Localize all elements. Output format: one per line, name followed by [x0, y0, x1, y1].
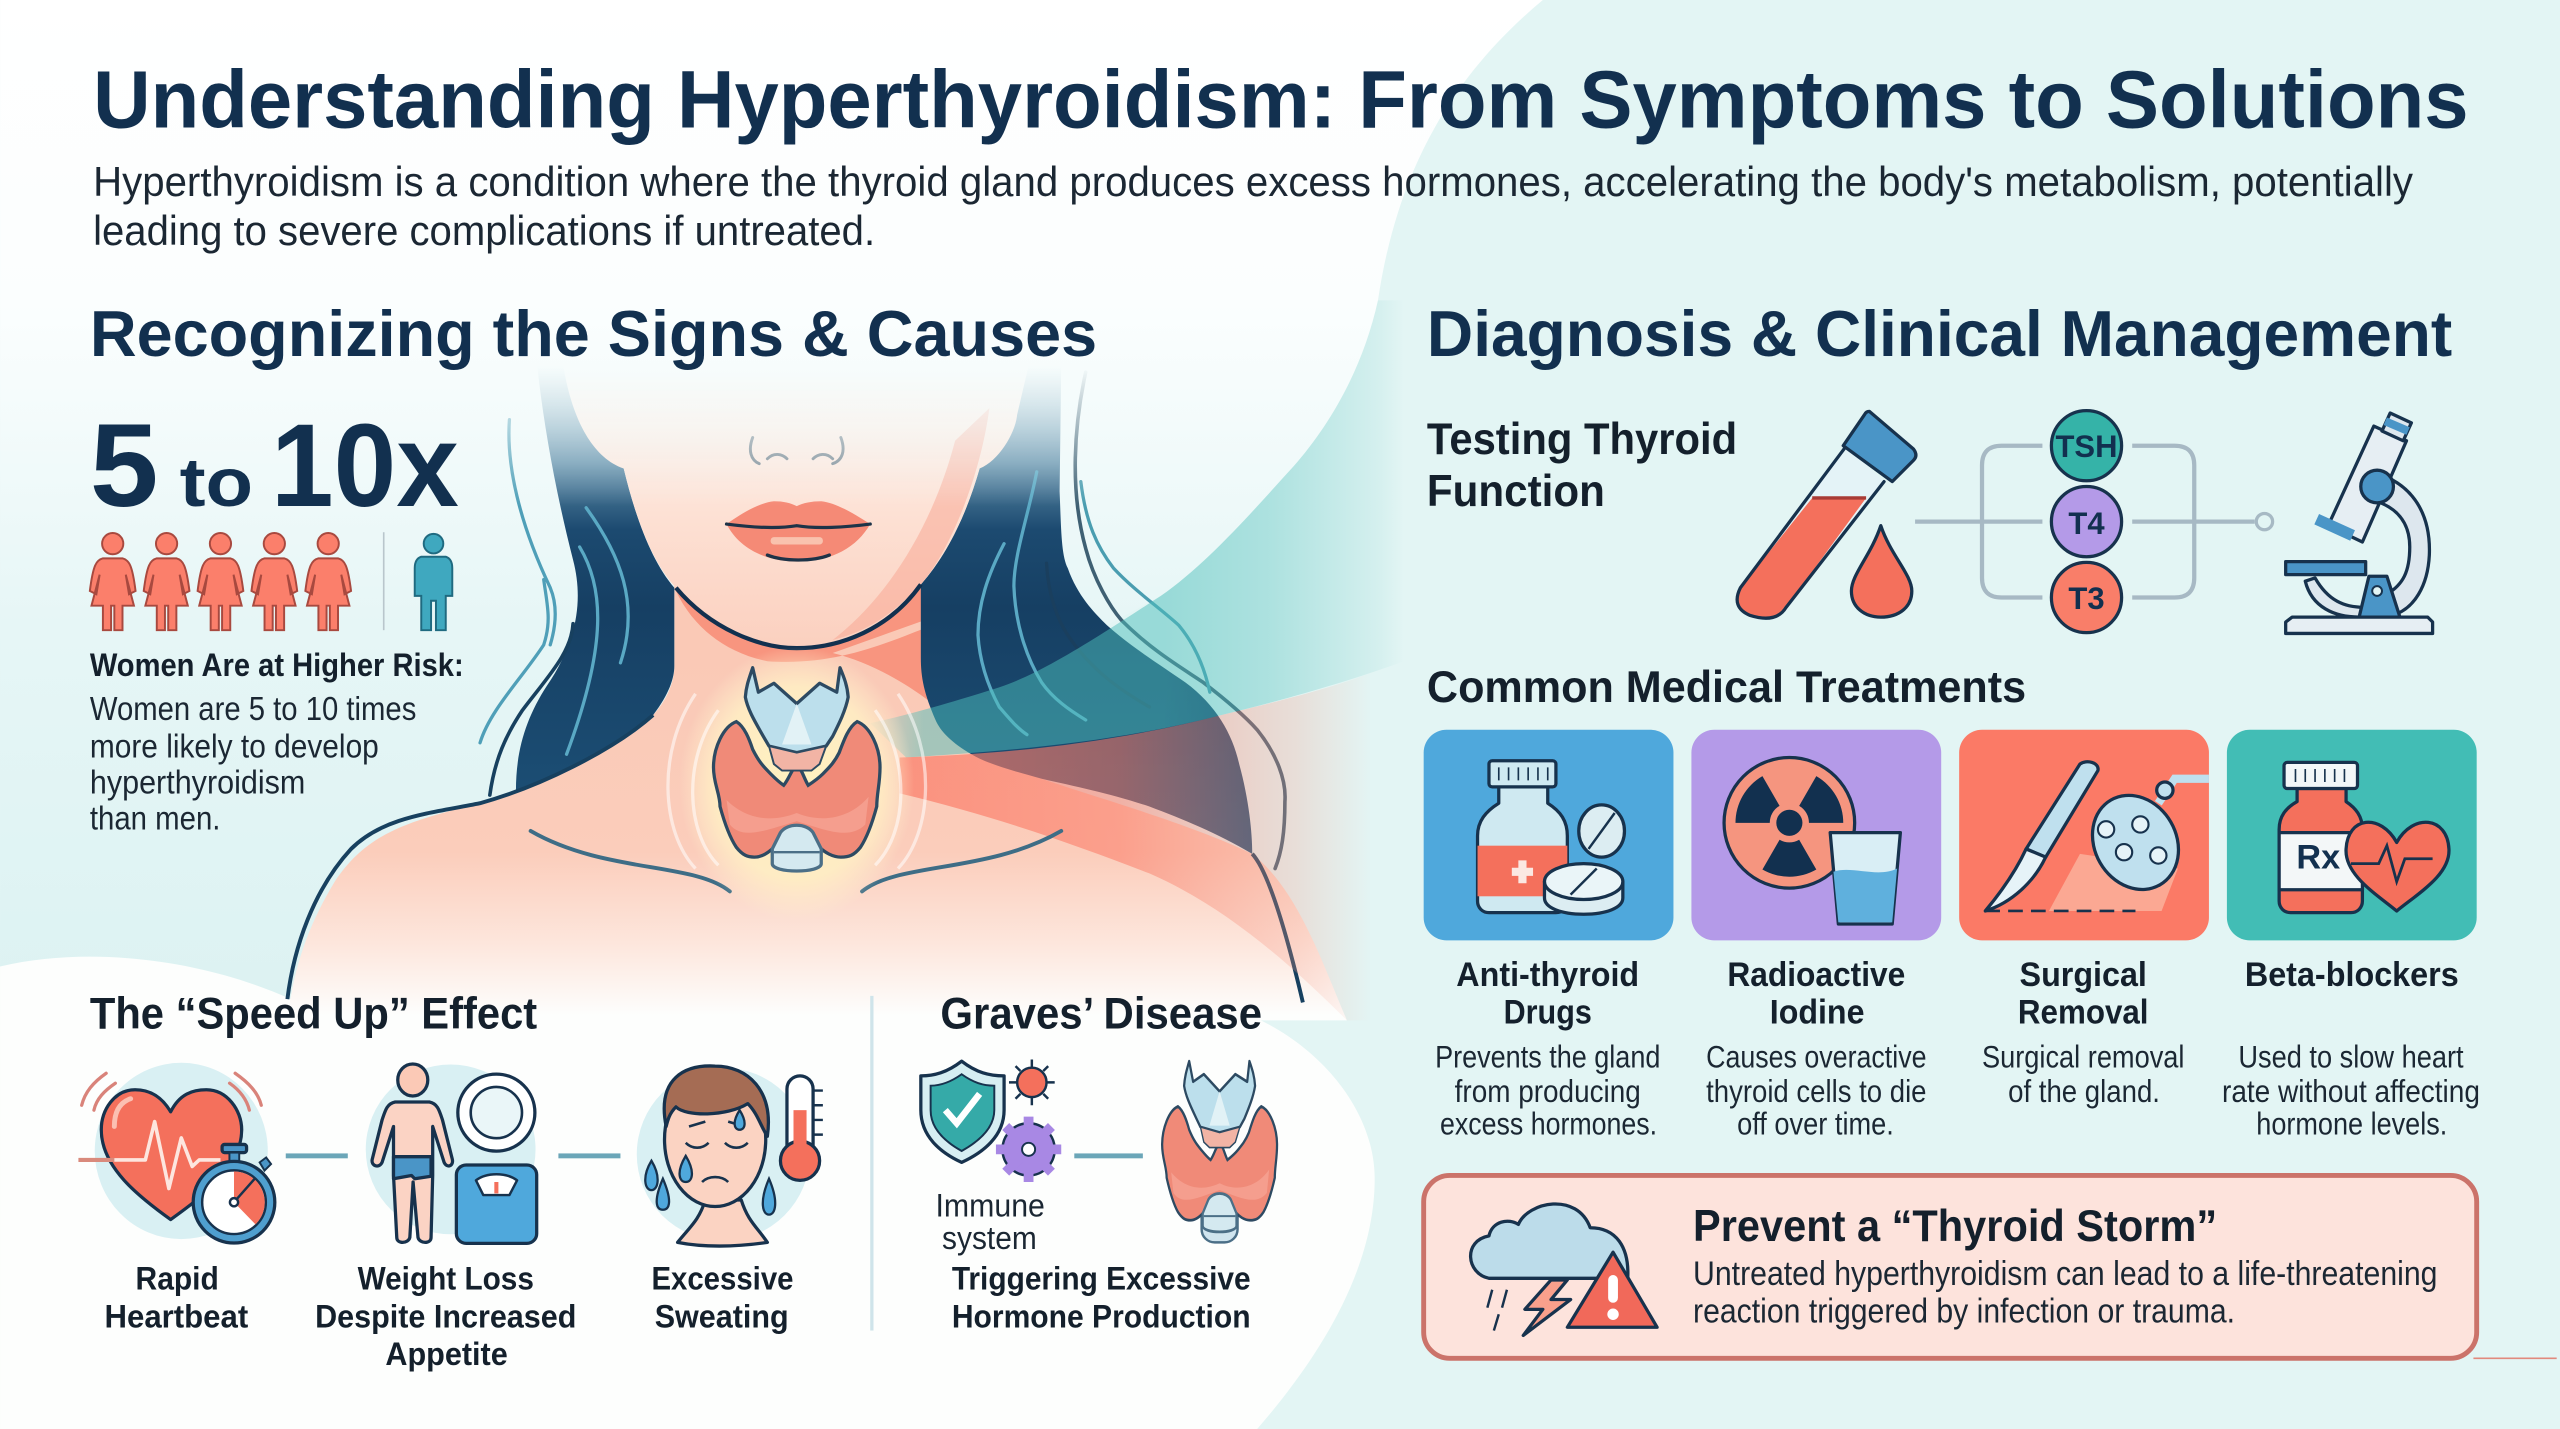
card: beta-blockers [2227, 730, 2477, 940]
labels: symptom captions: Heartbeat [105, 1297, 248, 1334]
captions: treatment descriptions: of the gland. [2008, 1074, 2160, 1109]
title: Understanding Hyperthyroidism: From Symptoms to Solutions [93, 54, 2469, 145]
TSH node [2051, 411, 2122, 481]
card: anti-thyroid drugs [1424, 730, 1673, 940]
lips [727, 501, 870, 562]
captions: treatment titles: Anti-thyroid [1456, 956, 1639, 994]
labels: symptom captions: Despite Increased [315, 1297, 576, 1334]
captions: treatment descriptions: from producing [1455, 1074, 1641, 1109]
text: women at higher risk: than men. [90, 800, 220, 837]
intro text: leading to severe complications if untreated. [93, 207, 875, 254]
icon: excessive sweating [637, 1066, 823, 1246]
heading: common medical treatments: Common Medical Treatments [1427, 663, 2026, 712]
captions: treatment descriptions [1435, 1040, 2480, 1142]
hair strands [480, 372, 1285, 869]
labels: symptom captions: Sweating [655, 1297, 789, 1334]
callout text: Untreated hyperthyroidism can lead to a life-threatening [1693, 1255, 2438, 1293]
statistic: 5 to 10x: to [180, 444, 253, 521]
labels: symptom captions: Hormone Production [952, 1297, 1251, 1334]
icon: bottle and pills [1478, 761, 1624, 914]
thyroid gland [713, 668, 880, 871]
right hair [921, 366, 1252, 854]
TSH node: TSH [2055, 429, 2117, 464]
icon: immune system [921, 1060, 1061, 1182]
captions: treatment titles: Beta-blockers [2245, 956, 2459, 994]
glow rings [668, 694, 926, 869]
text: women at higher risk [90, 646, 464, 837]
text: immune system label: system [942, 1219, 1037, 1256]
captions: treatment descriptions: Surgical removal [1982, 1040, 2184, 1075]
glow [679, 647, 914, 921]
captions: treatment titles: Radioactive [1727, 956, 1905, 994]
labels: symptom captions: Triggering Excessive [952, 1260, 1251, 1297]
icon: weight loss [366, 1064, 537, 1243]
callout text: Prevent a “Thyroid Storm” [1693, 1202, 2217, 1251]
captions: treatment titles: Iodine [1770, 994, 1864, 1032]
diagram: thyroid blood tests [1915, 411, 2273, 633]
left hair [516, 366, 674, 790]
T3 node: T3 [2068, 581, 2105, 616]
labels: symptom captions: Rapid [136, 1260, 219, 1297]
captions: treatment descriptions: thyroid cells to die [1706, 1074, 1927, 1109]
callout text [1693, 1202, 2438, 1330]
captions: treatment titles: Surgical [2020, 956, 2147, 994]
labels: symptom captions: Weight Loss [358, 1260, 534, 1297]
statistic: 5 to 10x [90, 400, 459, 531]
card: surgical removal [1959, 730, 2209, 940]
icon: radiation and glass [1724, 758, 1900, 924]
cheek shading [833, 408, 989, 640]
icon row: women versus men [90, 532, 452, 630]
collarbones [531, 831, 1061, 891]
icon: rapid heartbeat [78, 1063, 275, 1243]
labels: symptom captions: Appetite [385, 1335, 508, 1372]
text: women at higher risk: hyperthyroidism [90, 764, 305, 801]
heading: testing thyroid function [1427, 415, 1737, 516]
intro text [93, 158, 2413, 254]
icon: prescription bottle and heart: Rx [2296, 839, 2340, 877]
labels: symptom captions: Excessive [651, 1260, 793, 1297]
icon: test tube and drop [1737, 411, 1916, 618]
icon: storm cloud and warning [1471, 1204, 1657, 1335]
face [563, 366, 1029, 648]
jaw line [676, 584, 921, 648]
captions: treatment descriptions: rate without affecting [2222, 1074, 2480, 1109]
neck and shoulders [287, 571, 1347, 1020]
T4 node [2051, 487, 2122, 557]
captions: treatment descriptions: Prevents the gland [1435, 1040, 1660, 1075]
text: immune system label: Immune [936, 1186, 1045, 1223]
intro text: Hyperthyroidism is a condition where the thyroid gland produces excess hormones, accelerating the body's metabolism, potentially [93, 158, 2413, 205]
card: radioactive iodine [1691, 730, 1941, 940]
icon: microscope [2286, 413, 2433, 633]
captions: treatment descriptions: excess hormones. [1440, 1107, 1657, 1142]
chin shadow [676, 580, 931, 702]
teal beam [870, 300, 1404, 758]
heading: signs and causes: Recognizing the Signs & Causes [90, 297, 1097, 370]
nose [750, 438, 843, 464]
text: women at higher risk: more likely to develop [90, 729, 379, 766]
icon: scalpel and surgical lamp [1985, 762, 2209, 911]
figure fading into the page [287, 366, 1347, 1020]
captions: treatment descriptions: Used to slow heart [2238, 1040, 2464, 1075]
captions: treatment descriptions: hormone levels. [2256, 1107, 2447, 1142]
statistic: 5 to 10x: 5 [90, 400, 158, 531]
labels: symptom captions [105, 1260, 1251, 1372]
statistic: 5 to 10x: 10x [271, 400, 459, 531]
illustration: woman's neck and thyroid [287, 300, 1404, 1020]
callout text: reaction triggered by infection or trauma. [1693, 1292, 2235, 1330]
heading: testing thyroid function: Function [1427, 467, 1605, 516]
callout: thyroid storm [1424, 1175, 2557, 1358]
captions: treatment titles: Drugs [1504, 994, 1592, 1032]
T3 node [2051, 562, 2122, 633]
text: women at higher risk: Women Are at Higher Risk: [90, 646, 464, 683]
text: women at higher risk: Women are 5 to 10 times [90, 691, 416, 728]
icon: thyroid gland [1162, 1061, 1277, 1242]
coral beam [900, 673, 1371, 1020]
captions: treatment titles [1456, 956, 2459, 1032]
heading: speed up effect: The “Speed Up” Effect [90, 990, 537, 1039]
captions: treatment descriptions: off over time. [1737, 1107, 1894, 1142]
text: immune system label [936, 1186, 1045, 1256]
captions: treatment descriptions: Causes overactive [1706, 1040, 1927, 1075]
icon: prescription bottle and heart [2279, 762, 2449, 913]
T4 node: T4 [2068, 506, 2105, 541]
heading: graves disease: Graves’ Disease [940, 990, 1262, 1039]
heading: testing thyroid function: Testing Thyroid [1427, 415, 1737, 464]
captions: treatment titles: Removal [2018, 994, 2149, 1032]
shoulder outline [287, 715, 1303, 1002]
heading: diagnosis: Diagnosis & Clinical Management [1427, 297, 2452, 370]
